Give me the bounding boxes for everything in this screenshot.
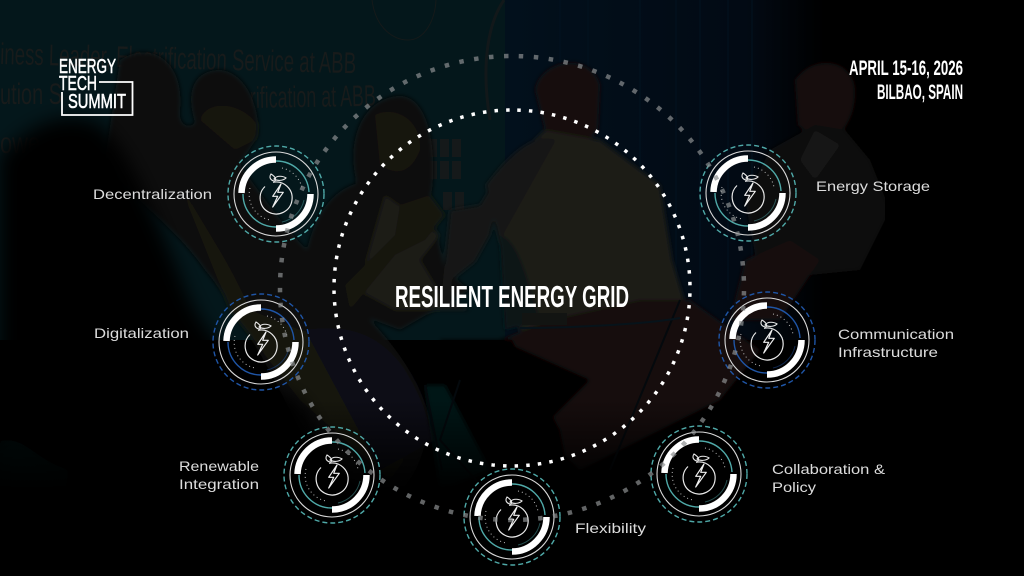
label: Flexibility: Flexibility bbox=[575, 520, 646, 536]
outer ring of grey square dots bbox=[280, 56, 744, 520]
node: Collaboration and Policy bbox=[651, 426, 886, 522]
inner ring of white square dots bbox=[334, 110, 690, 466]
label: Energy Storage: Energy Storage bbox=[816, 178, 930, 194]
node: Communication Infrastructure bbox=[719, 292, 954, 388]
background: panel discussion photo: rification at ABB bbox=[250, 80, 376, 115]
label: Decentralization: Decentralization bbox=[93, 186, 212, 202]
label: Renewable Integration: Renewable bbox=[179, 458, 259, 474]
background: panel discussion photo: owe bbox=[0, 127, 40, 160]
event date and location bbox=[849, 57, 963, 104]
label: Communication Infrastructure: Communication bbox=[838, 326, 954, 342]
label: Digitalization: Digitalization bbox=[94, 325, 189, 341]
background: panel discussion photo: iness Leader, Electrification Service at ABB bbox=[0, 38, 357, 80]
logo: Energy Tech Summit: SUMMIT bbox=[68, 90, 126, 113]
node: Decentralization bbox=[93, 146, 324, 242]
logo: Energy Tech Summit: TECH bbox=[59, 72, 97, 95]
title: RESILIENT ENERGY GRID bbox=[395, 279, 629, 314]
label: Collaboration and Policy: Collaboration & bbox=[772, 461, 886, 477]
label: Collaboration and Policy: Policy bbox=[772, 479, 816, 495]
label: Renewable Integration: Integration bbox=[179, 476, 259, 492]
node: Flexibility bbox=[464, 469, 646, 565]
node: Energy Storage bbox=[700, 145, 930, 241]
logo: Energy Tech Summit bbox=[59, 55, 132, 115]
label: Communication Infrastructure: Infrastructure bbox=[838, 344, 938, 360]
logo: Energy Tech Summit: ENERGY bbox=[59, 55, 116, 78]
node: Digitalization bbox=[94, 294, 309, 390]
background: panel discussion photo: ution S bbox=[0, 78, 62, 111]
node: Renewable Integration bbox=[179, 427, 380, 523]
